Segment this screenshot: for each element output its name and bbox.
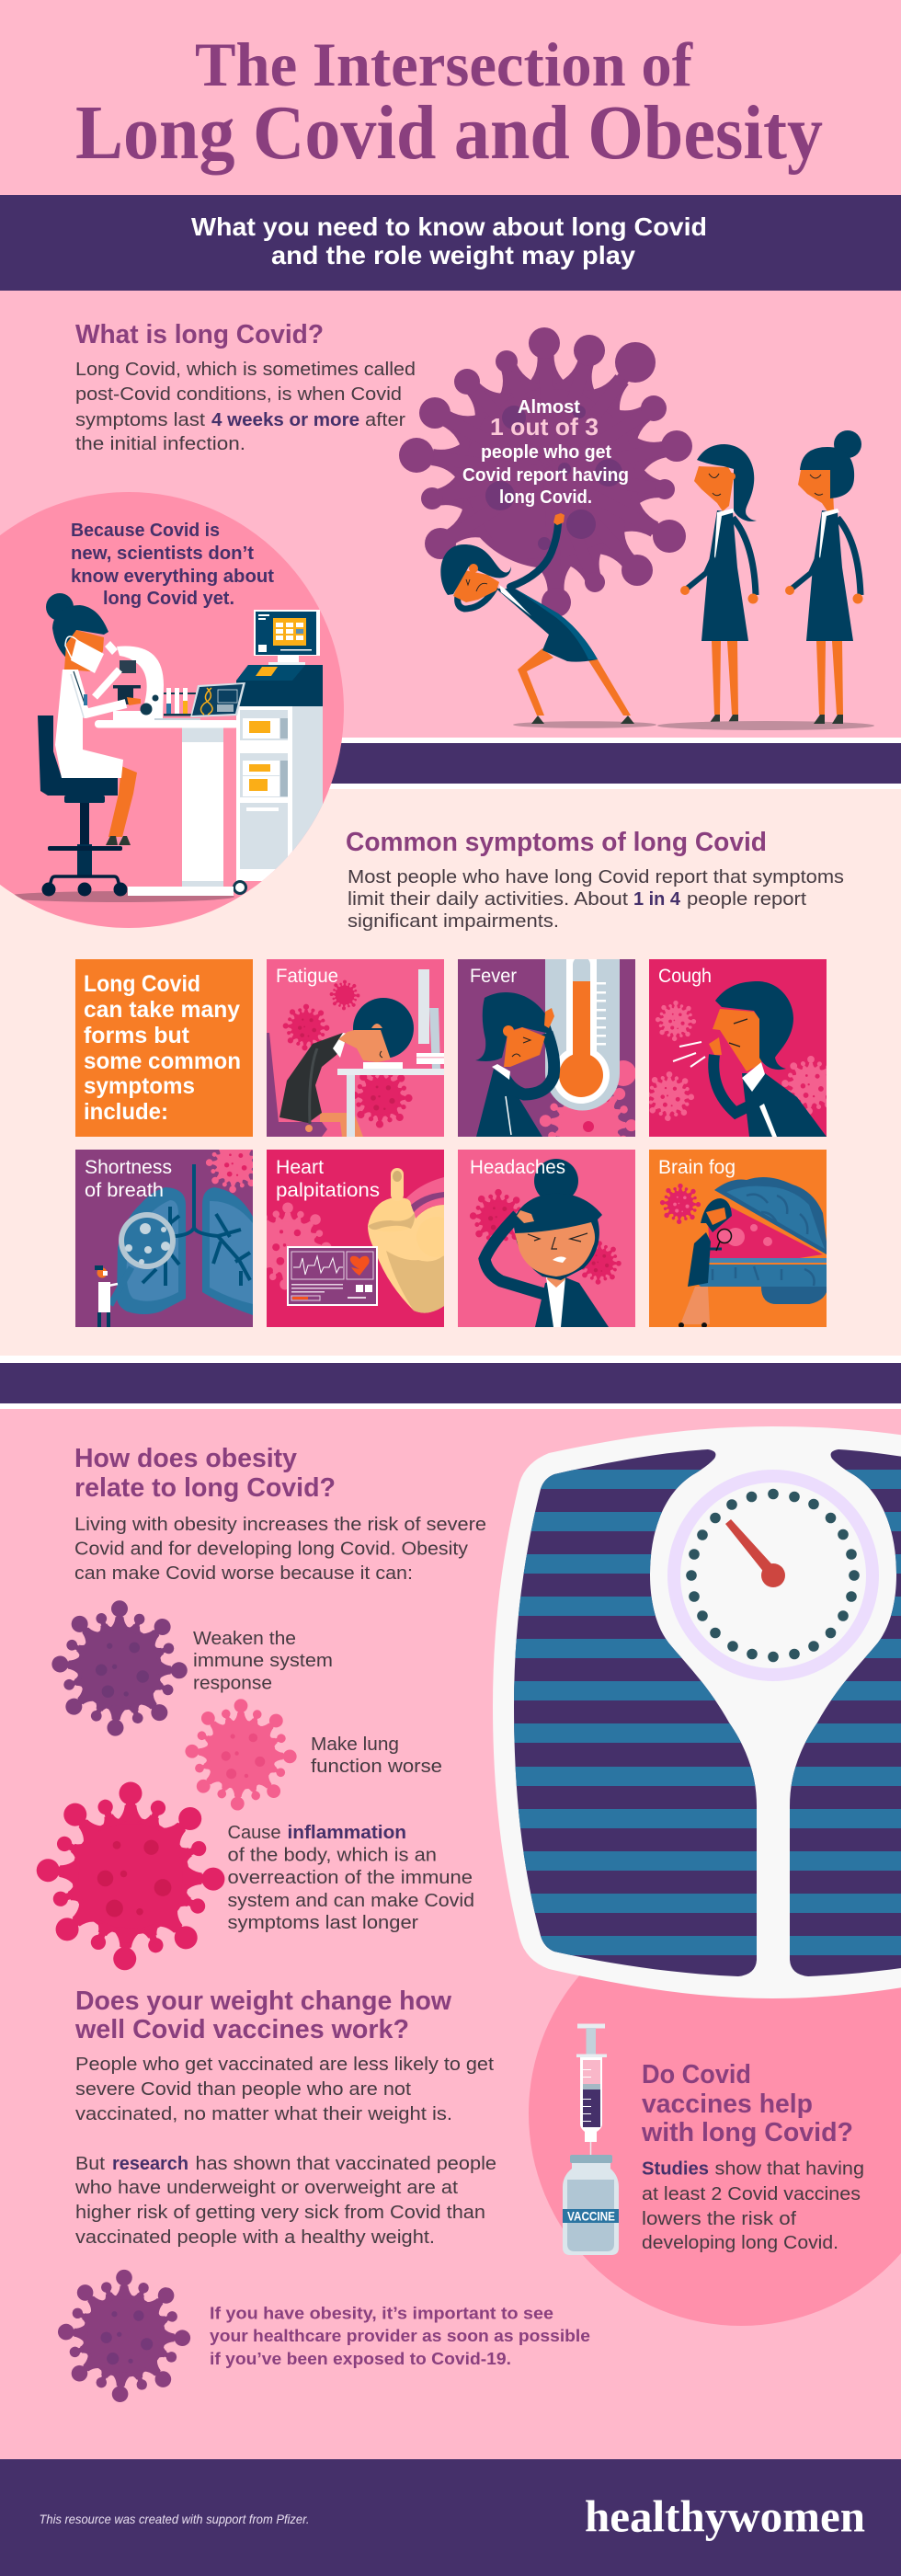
panel: symptoms intro tile: include: [84, 1099, 168, 1125]
illustration: syringe and vial [563, 2023, 619, 2255]
section: do Covid vaccines help [641, 2060, 864, 2253]
section: do Covid vaccines help: show that having [715, 2159, 864, 2180]
panel: heart palpitations tile [267, 1150, 444, 1327]
section: common symptoms text [346, 828, 844, 932]
text: inflammation: Cause [228, 1823, 281, 1843]
title: Long Covid and Obesity [75, 90, 823, 176]
big virus with statistic: 1 out of 3 [490, 413, 599, 441]
callout: scientists text [71, 521, 274, 609]
title [75, 29, 823, 176]
big virus with statistic: people who get [481, 442, 611, 463]
section: do Covid vaccines help: lowers the risk of [642, 2209, 796, 2229]
section: does weight change vaccines: Does your weight change how [75, 1986, 451, 2016]
section: does weight change vaccines: vaccinated people with a healthy weight. [75, 2227, 435, 2248]
subtitle banner: and the role weight may play [271, 241, 635, 269]
big virus with statistic [399, 327, 692, 617]
section: how does obesity relate: Living with obesity increases the risk of severe [74, 1515, 486, 1535]
panel: heart palpitations tile: palpitations [276, 1180, 380, 1201]
text: weaken immune system: Weaken the [193, 1629, 296, 1649]
lab microscope and tubes [105, 641, 245, 720]
section: what is long Covid text: Long Covid, which is sometimes called [75, 360, 416, 380]
callout: see your healthcare provider [210, 2305, 590, 2368]
text: weaken immune system: immune system [193, 1651, 333, 1671]
label: Brain fog [658, 1157, 736, 1178]
text: inflammation: inflammation [287, 1823, 406, 1843]
band: white line below purple [0, 1403, 901, 1409]
lab scientist figure [46, 593, 141, 845]
title: The Intersection of [195, 29, 693, 99]
panel: symptoms intro tile: forms but [84, 1023, 190, 1048]
section: does weight change vaccines: higher risk of getting very sick from Covid than [75, 2203, 485, 2223]
vial label: VACCINE [567, 2209, 615, 2224]
panel: shortness of breath tile [75, 1150, 253, 1327]
text: inflammation: of the body, which is an [228, 1845, 437, 1865]
section: do Covid vaccines help: developing long Covid. [642, 2233, 838, 2253]
label: Fever [470, 966, 517, 987]
left panel with stripes [506, 1444, 763, 1986]
subtitle banner: What you need to know about long Covid [191, 212, 707, 241]
illustration: bathroom scale [493, 1426, 901, 1998]
panel: symptoms intro tile: some common [84, 1048, 241, 1074]
panel: fever tile [458, 959, 635, 1137]
illustration: lab scientist [5, 593, 323, 902]
panel: lab circle [0, 492, 344, 928]
section: what is long Covid text: the initial infection. [75, 434, 245, 454]
section: what is long Covid text: after [365, 410, 405, 430]
panel: symptoms intro tile: symptoms [84, 1073, 195, 1099]
panel: cough tile [644, 959, 840, 1137]
band: white line [0, 784, 901, 789]
lab equipment [233, 610, 323, 895]
text: inflammation: system and can make Covid [228, 1891, 474, 1911]
callout: see your healthcare provider: If you have obesity, it’s important to see [210, 2305, 553, 2323]
panel: symptoms intro tile: can take many [84, 997, 240, 1023]
label: Cough [658, 966, 712, 987]
logo: healthywomen: healthywomen [585, 2490, 865, 2542]
section: does weight change vaccines: who have underweight or overweight are at [74, 2178, 458, 2198]
band: white line above purple [0, 1356, 901, 1363]
section: does weight change vaccines: severe Covid than people who are not [75, 2079, 411, 2100]
panel: shortness of breath tile: of breath [85, 1180, 164, 1201]
section: common symptoms text: limit their daily activities. About [348, 889, 628, 910]
panel: symptoms background [0, 789, 901, 1356]
section: how does obesity relate [74, 1444, 486, 1584]
callout: scientists text: Because Covid is [71, 521, 220, 541]
callout: see your healthcare provider: if you’ve been exposed to Covid-19. [210, 2350, 511, 2368]
icon: purple virus, immune system [51, 1600, 188, 1737]
icon: magenta virus, inflammation [35, 1782, 225, 1972]
section: what is long Covid text: post-Covid conditions, is when Covid [75, 384, 402, 405]
section: do Covid vaccines help: with long Covid? [641, 2118, 853, 2147]
section: common symptoms text: Most people who have long Covid report that symptoms [348, 867, 844, 887]
section: does weight change vaccines: research [112, 2154, 188, 2174]
big virus with statistic: Covid report having [462, 465, 629, 486]
text: weaken immune system [193, 1629, 333, 1694]
label: Shortness [85, 1157, 172, 1178]
band: purple divider [0, 743, 901, 784]
section: does weight change vaccines: has shown that vaccinated people [195, 2154, 496, 2174]
text: inflammation: symptoms last longer [228, 1913, 418, 1933]
panel: headaches tile [458, 1150, 635, 1327]
section: do Covid vaccines help: vaccines help [642, 2089, 813, 2119]
text: inflammation: overreaction of the immune [228, 1868, 473, 1888]
section: does weight change vaccines [74, 1986, 496, 2248]
label: Headaches [470, 1157, 565, 1178]
lab desk [95, 720, 239, 896]
section: what is long Covid text: What is long Covid? [75, 320, 324, 349]
section: does weight change vaccines: People who get vaccinated are less likely to get [75, 2055, 494, 2075]
icon: bottom virus [57, 2270, 191, 2403]
section: does weight change vaccines: vaccinated, no matter what their weight is. [75, 2104, 452, 2124]
band: white line above divider [0, 738, 901, 743]
section: do Covid vaccines help: Do Covid [642, 2060, 751, 2089]
callout: scientists text: new, scientists don’t [71, 544, 254, 564]
section: how does obesity relate: relate to long Covid? [74, 1473, 336, 1503]
panel: fatigue tile [267, 959, 444, 1137]
text: inflammation [228, 1823, 474, 1933]
panel: brain fog tile [649, 1150, 827, 1328]
lab chair [38, 716, 127, 896]
section: common symptoms text: Common symptoms of long Covid [346, 828, 767, 857]
section: common symptoms text: significant impairments. [348, 911, 559, 932]
panel: symptoms intro tile: Long Covid [84, 971, 200, 997]
section: common symptoms text: people report [687, 889, 806, 910]
section: what is long Covid text: 4 weeks or more [211, 410, 359, 430]
right panel with stripes [783, 1444, 901, 1986]
pink circle: vaccines behind scale [529, 1901, 901, 2326]
label: Fatigue [276, 966, 338, 987]
footer [0, 2459, 901, 2576]
section: how does obesity relate: can make Covid worse because it can: [74, 1563, 413, 1584]
band: second purple divider [0, 1363, 901, 1403]
section: does weight change vaccines: But [75, 2154, 105, 2174]
section: does weight change vaccines: well Covid vaccines work? [74, 2015, 409, 2044]
panel: symptoms intro tile [75, 959, 253, 1137]
text: lung function [311, 1735, 442, 1777]
section: how does obesity relate: Covid and for developing long Covid. Obesity [74, 1540, 468, 1560]
text: lung function: Make lung [311, 1735, 399, 1755]
big virus with statistic: long Covid. [499, 487, 592, 508]
big virus with statistic: Almost [518, 397, 580, 418]
callout: scientists text: know everything about [71, 567, 274, 587]
illustration: woman bent under virus [440, 513, 656, 728]
text: weaken immune system: response [193, 1674, 272, 1694]
icon: pink virus, lungs [185, 1699, 297, 1811]
section: do Covid vaccines help: Studies [642, 2159, 709, 2180]
section: what is long Covid text: symptoms last [75, 410, 205, 430]
illustration: standing woman 1 [680, 444, 758, 724]
section: how does obesity relate: How does obesity [74, 1444, 297, 1473]
text: lung function: function worse [311, 1757, 442, 1777]
callout: scientists text: long Covid yet. [103, 589, 234, 609]
section: common symptoms text: 1 in 4 [633, 889, 681, 910]
sponsor note: This resource was created with support from Pfizer. [39, 2512, 309, 2526]
subtitle banner [0, 195, 901, 291]
label: Heart [276, 1157, 324, 1178]
scale dial [667, 1470, 879, 1681]
section: do Covid vaccines help: at least 2 Covid vaccines [642, 2184, 861, 2204]
section: what is long Covid text [75, 320, 416, 454]
callout: see your healthcare provider: your healthcare provider as soon as possible [210, 2327, 590, 2345]
illustration: standing woman 2 [657, 430, 874, 730]
